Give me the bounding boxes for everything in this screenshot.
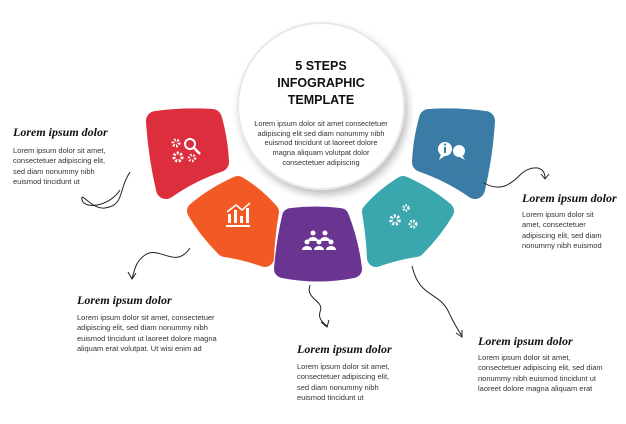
text block 1: Lorem ipsum dolor	[13, 125, 108, 139]
title: INFOGRAPHIC	[277, 76, 365, 90]
icon: info chat	[438, 142, 465, 160]
icon: gears search	[173, 139, 200, 161]
text block 5	[478, 334, 603, 393]
text block 3: sed diam nonummy nibh	[297, 383, 379, 392]
text block 2: adipiscing elit, sed diam nonummy nibh	[77, 323, 208, 332]
step 1 red shape	[156, 118, 219, 189]
center text: Lorem ipsum dolor sit amet consectetuer	[254, 119, 388, 128]
text block 4: adipiscing elit, sed diam	[522, 231, 602, 240]
text block 1: sed diam nonummy nibh	[13, 167, 95, 176]
text block 2: Lorem ipsum dolor sit amet, consectetuer	[77, 313, 215, 322]
step 2 orange shape	[196, 185, 270, 258]
text block 4: Lorem ipsum dolor	[522, 191, 617, 205]
title	[277, 59, 365, 107]
text block 4	[522, 191, 617, 250]
text block 4: nonummy nibh euismod	[522, 241, 602, 250]
text block 5: Lorem ipsum dolor	[478, 334, 573, 348]
text block 2	[76, 293, 217, 353]
step 4 teal shape	[371, 185, 445, 258]
text block 1: consectetuer adipiscing elit,	[13, 156, 105, 165]
text block 4: Lorem ipsum dolor sit	[522, 210, 594, 219]
center text	[254, 119, 388, 167]
text block 4: amet, consectetuer	[522, 220, 586, 229]
text block 3: euismod tincidunt ut	[297, 393, 364, 402]
title: 5 STEPS	[295, 59, 347, 73]
arrows	[82, 168, 549, 337]
title: TEMPLATE	[288, 93, 354, 107]
center text: adipiscing elit sed diam nonummy nibh	[258, 129, 384, 138]
text block 2: Lorem ipsum dolor	[77, 293, 172, 307]
text block 5: consectetuer adipiscing elit, sed diam	[478, 363, 603, 372]
step 3 purple shape	[283, 216, 353, 272]
text block 1	[12, 125, 108, 186]
text block 2: euismod tincidunt ut laoreet dolore magna	[77, 334, 217, 343]
step 5 blue shape	[422, 118, 485, 189]
text block 1: euismod tincidunt ut	[13, 177, 80, 186]
icon: team	[302, 230, 336, 250]
text block 1: Lorem ipsum dolor sit amet,	[13, 146, 106, 155]
text block 2: aliquam erat volutpat. Ut wisi enim ad	[77, 344, 202, 353]
text block 3: Lorem ipsum dolor sit amet,	[297, 362, 390, 371]
icon: gears	[391, 206, 416, 227]
text block 3	[296, 342, 392, 402]
text block 3: Lorem ipsum dolor	[297, 342, 392, 356]
center text: euismod tincidunt ut laoreet dolore	[264, 138, 377, 147]
center circle	[238, 23, 404, 189]
text block 5: nonummy nibh euismod tincidunt ut	[478, 374, 596, 383]
center text: consectetuer adipiscing	[282, 158, 360, 167]
text block 5: Lorem ipsum dolor sit amet,	[478, 353, 571, 362]
center text: magna aliquam volutpat dolor	[273, 148, 369, 157]
icon: bar chart	[226, 203, 250, 227]
text block 3: consectetuer adipiscing elit,	[297, 372, 389, 381]
text block 5: laoreet dolore magna aliquam erat	[478, 384, 592, 393]
